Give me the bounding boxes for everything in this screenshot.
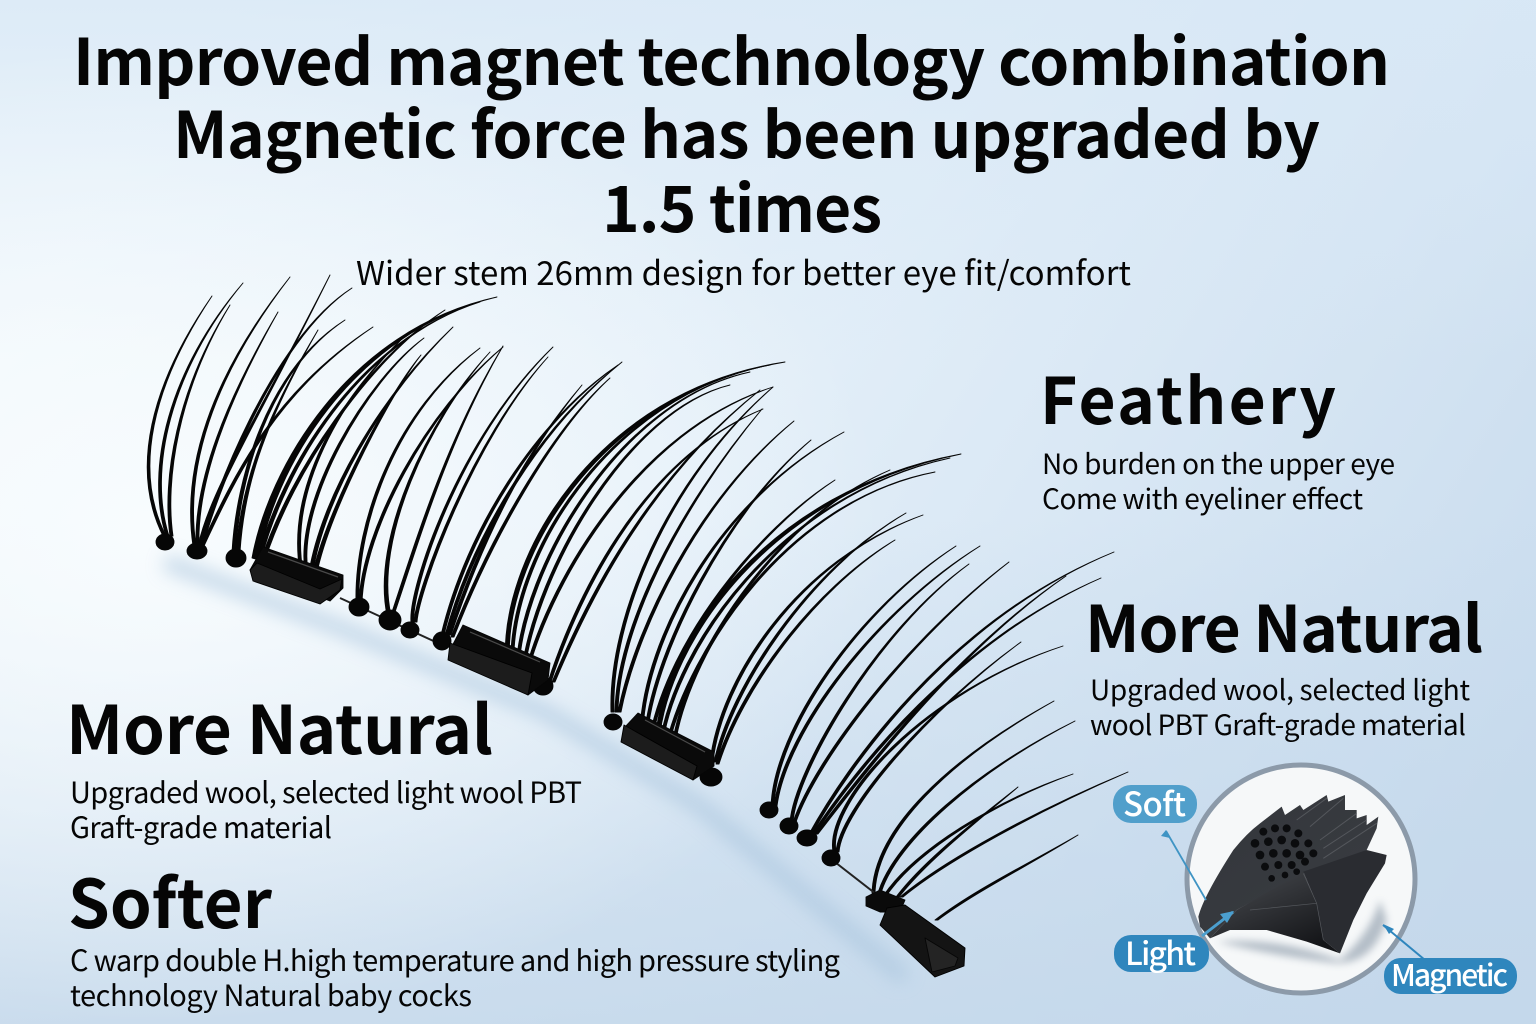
lash root bulbs bbox=[156, 534, 840, 866]
title: 1.5 times bbox=[602, 159, 882, 251]
fibre front facets bbox=[1210, 872, 1340, 953]
feature: Softer bbox=[68, 851, 840, 1015]
callout: Magnetic: Magnetic bbox=[1391, 951, 1508, 995]
feature: More Natural right: Upgraded wool, selected light bbox=[1090, 669, 1470, 709]
honeycomb texture bbox=[1251, 824, 1317, 882]
title: Improved magnet technology combination bbox=[73, 12, 1390, 104]
feature: More Natural right bbox=[1085, 579, 1483, 744]
magnet clip 4 bbox=[866, 890, 965, 977]
feature: Feathery: Come with eyeliner effect bbox=[1042, 478, 1363, 518]
callout: Soft: Soft bbox=[1123, 778, 1186, 826]
feature: Softer: Softer bbox=[68, 851, 273, 948]
connecting wires bbox=[340, 598, 876, 894]
feature: More Natural left: Graft-grade material bbox=[70, 805, 332, 847]
feature: Softer: C warp double H.high temperature and high pressure styling bbox=[70, 938, 840, 980]
title: Magnetic force has been upgraded by bbox=[173, 85, 1320, 177]
feature: Feathery: No burden on the upper eye bbox=[1042, 443, 1395, 483]
magnet clip 2 bbox=[448, 625, 550, 695]
callout: Light bbox=[1114, 911, 1234, 975]
detail circle: lash fibre close-up bbox=[1187, 765, 1415, 993]
fibre shadow bbox=[1217, 900, 1387, 963]
magnet clip 3 bbox=[621, 713, 714, 780]
shadow under lash strip bbox=[165, 562, 905, 978]
feature: More Natural left: Upgraded wool, selected light wool PBT bbox=[70, 770, 582, 812]
fibre ribs bbox=[1297, 798, 1377, 858]
feature: Softer: technology Natural baby cocks bbox=[70, 973, 472, 1015]
magnetic eyelash strip illustration bbox=[147, 275, 1128, 977]
magnet clip 1 bbox=[250, 547, 343, 604]
feature: More Natural right: wool PBT Graft-grade material bbox=[1090, 704, 1466, 744]
feature: Feathery: Feathery bbox=[1040, 351, 1336, 443]
title bbox=[73, 12, 1390, 251]
callout: Light: Light bbox=[1125, 929, 1196, 975]
feature: More Natural right: More Natural bbox=[1085, 579, 1483, 671]
fibre back fan bbox=[1198, 795, 1378, 938]
subtitle: Wider stem 26mm design for better eye fit/comfort bbox=[356, 247, 1131, 295]
feature: Feathery bbox=[1040, 351, 1395, 518]
feature: More Natural left bbox=[66, 677, 582, 847]
feature: More Natural left: More Natural bbox=[66, 677, 493, 774]
callout: Soft bbox=[1113, 778, 1206, 900]
callout: Magnetic bbox=[1383, 924, 1517, 995]
